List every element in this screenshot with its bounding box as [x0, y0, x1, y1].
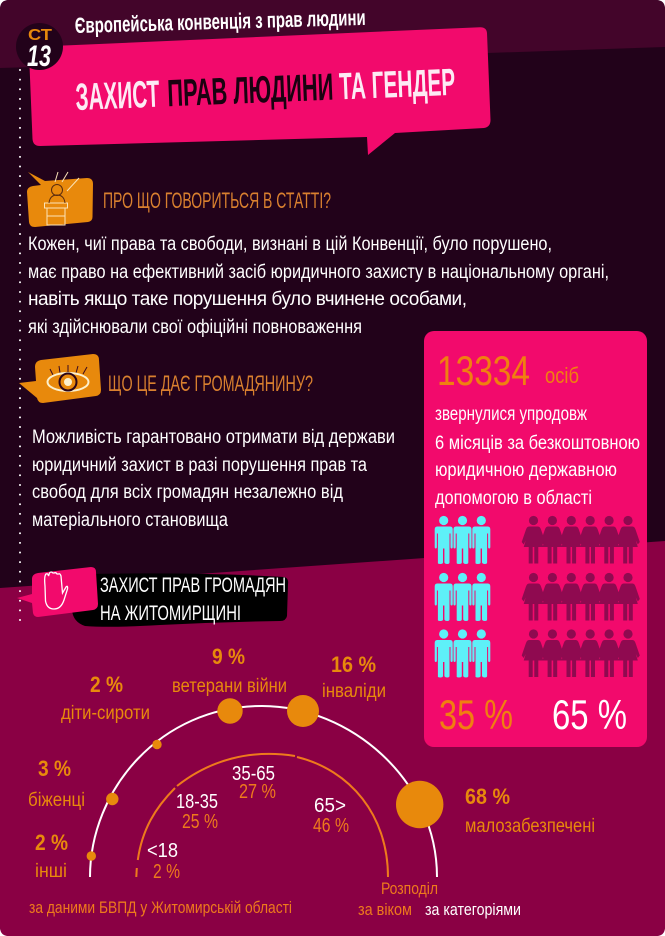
- icon: eye: [19, 354, 101, 403]
- age labels: 27 %: [239, 781, 276, 803]
- men percent: 35 %: [439, 691, 513, 738]
- heading text: ЗАХИСТ ПРАВ ГРОМАДЯН: [100, 574, 286, 597]
- category labels: 16 %: [331, 652, 376, 677]
- top maroon band: [0, 0, 665, 68]
- citizen benefit text block: юридичний захист в разі порушення прав та: [32, 455, 367, 476]
- heading text: [100, 574, 286, 625]
- icon: hand: [45, 572, 68, 609]
- article badge: [16, 23, 63, 73]
- chart legend: [358, 879, 521, 919]
- applicants description: звернулися упродовж: [435, 404, 587, 425]
- applicants description: юридичною державною: [435, 460, 617, 481]
- age labels: 2 %: [153, 861, 180, 883]
- chart: distribution by age: [136, 754, 388, 877]
- article text block: [28, 234, 609, 338]
- main title: ПРАВ ЛЮДИНИ: [167, 67, 334, 115]
- age labels: 18-35: [176, 791, 218, 813]
- citizen benefit text block: [32, 427, 395, 531]
- main title: ТА ГЕНДЕР: [338, 62, 456, 108]
- category labels: біженці: [28, 790, 85, 811]
- chart legend: за віком: [358, 900, 412, 919]
- citizen benefit text block: Можливість гарантовано отримати від держави: [32, 427, 395, 448]
- applicants description: [435, 404, 640, 509]
- age labels: 46 %: [313, 815, 349, 837]
- heading: what it gives a citizen: ЩО ЦЕ ДАЄ ГРОМАДЯНИНУ?: [108, 371, 313, 396]
- article text block: які здійснювали свої офіційні повноваження: [28, 317, 362, 338]
- category labels: інваліди: [322, 681, 386, 702]
- chart: distribution by categories: [87, 695, 443, 877]
- women percent: 65 %: [552, 691, 627, 738]
- chart legend: Розподіл: [381, 879, 438, 898]
- bottom crimson panel: [0, 541, 665, 936]
- age labels: 65>: [314, 795, 346, 817]
- citizen benefit text block: свобод для всіх громадян незалежно від: [32, 482, 343, 503]
- persons unit: осіб: [545, 363, 579, 388]
- category labels: малозабезпечені: [465, 816, 595, 837]
- age labels: 35-65: [232, 763, 275, 785]
- article text block: Кожен, чиї права та свободи, визнані в цій Конвенції, було порушено,: [28, 234, 552, 255]
- main title: ЗАХИСТ: [75, 74, 160, 119]
- age labels: 25 %: [182, 811, 218, 833]
- men pictogram: [435, 516, 490, 678]
- category labels: ветерани війни: [172, 676, 287, 697]
- heading text: НА ЖИТОМИРЩИНІ: [100, 602, 241, 625]
- panel: legal aid statistics: [424, 331, 647, 747]
- citizen benefit text block: матеріального становища: [32, 510, 228, 531]
- heading: what the article says: ПРО ЩО ГОВОРИТЬСЯ В СТАТТІ?: [103, 188, 331, 213]
- chart legend: за категоріями: [425, 900, 521, 919]
- convention subtitle: Європейська конвенція з прав людини: [74, 5, 366, 38]
- title speech bubble: [29, 27, 490, 155]
- women pictogram: [522, 516, 640, 677]
- category labels: 2 %: [35, 830, 68, 855]
- category labels: інші: [35, 861, 67, 882]
- category labels: 3 %: [38, 756, 71, 781]
- section heading: rights protection: [17, 567, 288, 627]
- age labels: [147, 763, 349, 883]
- article text block: навіть якщо таке порушення було вчинене особами,: [28, 289, 467, 310]
- total applicants number: 13334: [437, 347, 530, 394]
- article badge: СТ: [28, 27, 52, 44]
- category labels: діти-сироти: [61, 703, 150, 724]
- source note: за даними БВПД у Житомирській області: [29, 898, 292, 917]
- article badge: 13: [27, 40, 51, 73]
- age labels: <18: [147, 840, 178, 862]
- applicants description: 6 місяців за безкоштовною: [435, 433, 640, 454]
- dotted vertical line: [19, 70, 21, 622]
- category labels: 9 %: [212, 644, 245, 669]
- icon: speaker at podium: [27, 172, 93, 227]
- category labels: 68 %: [465, 784, 510, 809]
- applicants description: допомогою в області: [435, 488, 592, 509]
- category labels: [28, 644, 595, 882]
- category labels: 2 %: [90, 672, 123, 697]
